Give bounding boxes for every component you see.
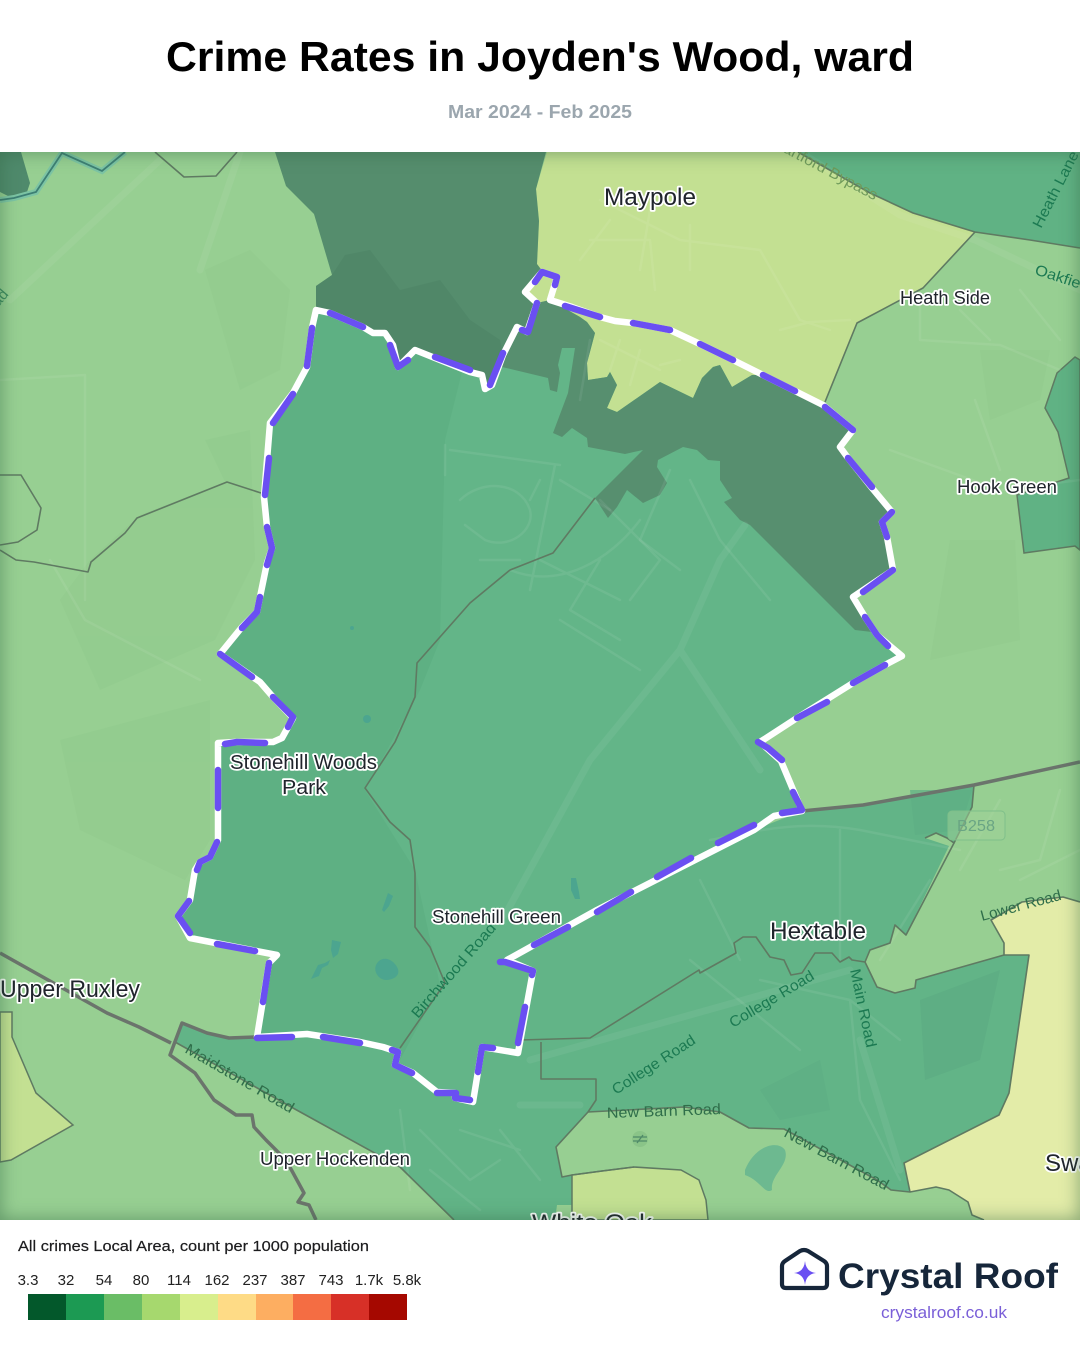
ponds: [311, 626, 786, 1191]
rail station symbol: [632, 1131, 648, 1147]
brand: Crystal Roof logo: [780, 1248, 1058, 1322]
legend scale values: 80: [133, 1272, 149, 1289]
place labels: Upper Hockenden: [260, 1149, 410, 1169]
area: Hextable mid green: [175, 785, 1029, 1220]
place labels: Maypole: [604, 184, 696, 211]
website: crystalroof.co.uk: [881, 1304, 1008, 1322]
legend scale values: 162: [204, 1272, 230, 1289]
road badge: B258: B258: [957, 818, 995, 835]
area: east pale yellow: [904, 897, 1080, 1220]
area: top left dark corner: [0, 152, 30, 199]
legend scale values: 54: [96, 1272, 112, 1289]
wordmark: Crystal Roof: [838, 1257, 1058, 1296]
legend scale values: 32: [58, 1272, 74, 1289]
area: right mid green pocket: [1017, 357, 1080, 553]
area: ward fill: [178, 300, 902, 1102]
road labels: Lower Road: [979, 887, 1063, 925]
area: dark north block: [275, 152, 546, 389]
area: wooded west of ward: [170, 300, 480, 1060]
place labels: Park: [282, 777, 327, 799]
area: dark north block shading: [316, 250, 503, 385]
legend scale values: 387: [280, 1272, 306, 1289]
ward boundary: purple dashes: [178, 272, 893, 1100]
icon: house with star: [782, 1250, 827, 1288]
boundary lines between areas: [0, 152, 1080, 1220]
area: dark wood inside ward: [502, 300, 893, 632]
ward boundary: white line: [178, 272, 902, 1102]
legend colour ramp: [28, 1294, 407, 1320]
road labels: [0, 135, 1080, 1194]
darker patches east: [760, 790, 1000, 1120]
place labels: Stonehill Green: [432, 907, 561, 927]
legend scale values: 3.3: [18, 1272, 38, 1289]
road labels: Maidstone Road: [182, 1041, 297, 1117]
legend: [18, 1238, 422, 1320]
map edge vignette: [0, 152, 1080, 1220]
road labels: New Barn Road: [607, 1101, 721, 1122]
area: top right mid green: [798, 152, 1080, 248]
area: White Oak yellow-green: [572, 1167, 708, 1220]
choropleth map: [0, 152, 1080, 1220]
road labels: College Road: [726, 967, 817, 1031]
place labels: Upper Ruxley: [0, 976, 140, 1003]
place labels: Stonehill Woods: [230, 752, 377, 774]
place labels: Hook Green: [957, 477, 1057, 497]
road labels: Birchwood Road: [408, 920, 500, 1022]
streets: residential lighter lines: [0, 152, 1080, 1210]
title: Crime Rates in Joyden's Wood, ward: [166, 33, 914, 80]
place labels: Heath Side: [900, 288, 990, 308]
legend scale values: 114: [167, 1272, 191, 1289]
legend scale values: 743: [318, 1272, 344, 1289]
legend title: All crimes Local Area, count per 1000 population: [18, 1238, 369, 1255]
place labels: Hextable: [770, 918, 866, 945]
area: west yellow-green: [0, 1012, 73, 1162]
road labels: New Barn Road: [781, 1125, 892, 1194]
river: [0, 152, 125, 200]
legend scale values: 1.7k: [355, 1272, 384, 1289]
subtitle: date range: Mar 2024 - Feb 2025: [448, 102, 632, 122]
area: Maypole yellow-green: [525, 152, 975, 412]
road labels: College Road: [609, 1032, 699, 1098]
legend scale values: 5.8k: [393, 1272, 422, 1289]
road labels: Main Road: [846, 967, 879, 1049]
road labels: Heath Lane: [1029, 152, 1080, 231]
area: light green surrounding patches: [60, 250, 1050, 880]
road badge: B258: [948, 811, 1005, 840]
place labels: [0, 184, 1080, 1237]
legend scale values: 237: [242, 1272, 268, 1289]
legend scale values: [18, 1272, 422, 1289]
river line: [0, 152, 125, 200]
